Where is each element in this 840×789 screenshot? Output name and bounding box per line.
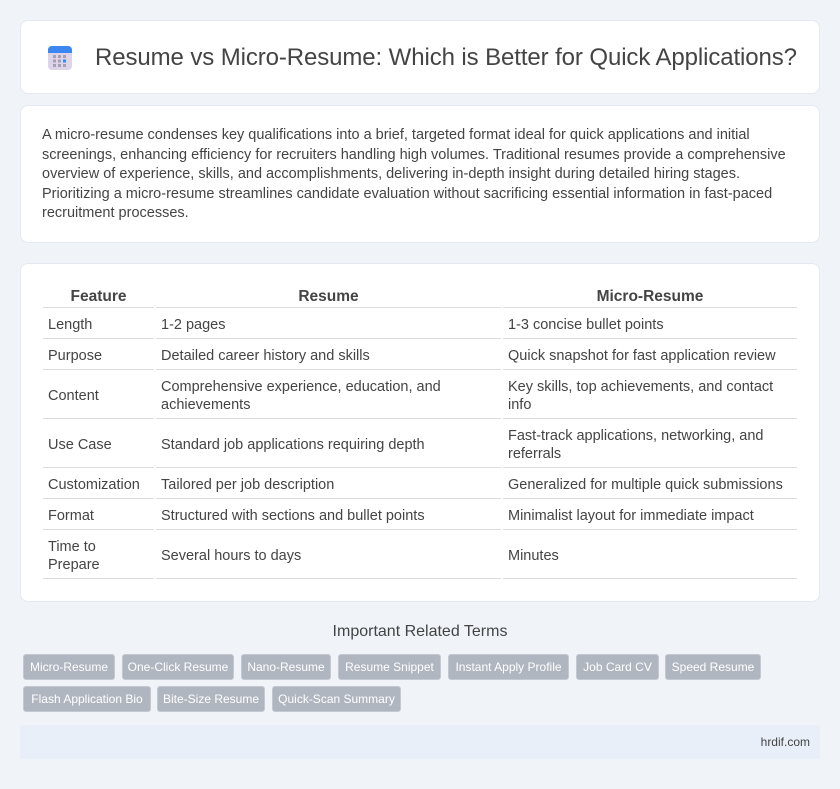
related terms heading: Important Related Terms [333, 623, 507, 640]
row: length: Length [48, 317, 92, 333]
column heading: resume: Resume [298, 288, 359, 305]
comparison table: 1-3 concise bullet points [508, 317, 664, 333]
comparison table: Structured with sections and bullet points [161, 508, 425, 524]
comparison table: Quick snapshot for fast application review [508, 348, 776, 364]
intro panel [20, 105, 820, 243]
row: time to prepare [48, 539, 100, 573]
tag: One-Click Resume [128, 660, 228, 674]
tag: Instant Apply Profile [455, 660, 562, 674]
row: customization: Customization [48, 477, 140, 493]
tag: Job Card CV [583, 660, 652, 674]
column heading: feature: Feature [70, 288, 126, 305]
comparison table: Generalized for multiple quick submissions [508, 477, 783, 493]
tag: Resume Snippet [345, 660, 434, 674]
comparison table: Fast-track applications, networking, and [508, 428, 764, 444]
tag [272, 686, 401, 712]
comparison table: Detailed career history and skills [161, 348, 370, 364]
intro text: overview of experience, skills, and accomplishments, delivering in-depth insight during detailed hiring stages. [42, 166, 740, 182]
tag [157, 686, 265, 712]
comparison table: achievements [161, 397, 250, 413]
row: purpose: Purpose [48, 348, 102, 364]
header panel [20, 20, 820, 94]
tag [241, 654, 331, 680]
tag [122, 654, 234, 680]
tag [23, 654, 115, 680]
related terms tags [23, 654, 761, 712]
intro text [42, 127, 786, 221]
tag [665, 654, 761, 680]
tag: Bite-Size Resume [163, 692, 259, 706]
tag [448, 654, 569, 680]
comparison table: Several hours to days [161, 548, 301, 564]
row: content: Content [48, 388, 99, 404]
tag [576, 654, 659, 680]
comparison table [43, 288, 797, 579]
row: format: Format [48, 508, 94, 524]
tag: Flash Application Bio [31, 692, 143, 706]
comparison table: Tailored per job description [161, 477, 334, 493]
comparison table: Key skills, top achievements, and contact [508, 379, 773, 395]
comparison table: Minutes [508, 548, 559, 564]
comparison table: referrals [508, 446, 561, 462]
intro text: screenings, enhancing efficiency for recruiters handling high volumes. Traditional resumes provide a comprehensive [42, 146, 786, 162]
tag [338, 654, 441, 680]
tag: Nano-Resume [247, 660, 325, 674]
title: Resume vs Micro-Resume: Which is Better for Quick Applications? [95, 44, 797, 71]
tag: Quick-Scan Summary [278, 692, 395, 706]
tag [23, 686, 151, 712]
comparison table: Standard job applications requiring depth [161, 437, 425, 453]
row: use case: Use Case [48, 437, 112, 453]
tag: Speed Resume [672, 660, 754, 674]
intro text: Prioritizing a micro-resume streamlines candidate evaluation without sacrificing essential information in fast-paced [42, 186, 772, 202]
comparison table: Minimalist layout for immediate impact [508, 508, 754, 524]
footer bar [20, 725, 820, 759]
icon: calendar [48, 46, 72, 70]
row: time to prepare: Time to [48, 539, 96, 555]
row: time to prepare: Prepare [48, 557, 100, 573]
comparison table: 1-2 pages [161, 317, 226, 333]
footer source: hrdif.com [761, 735, 810, 749]
intro text: A micro-resume condenses key qualifications into a brief, targeted format ideal for quick applications and initial [42, 127, 750, 143]
intro text: recruitment processes. [42, 205, 189, 221]
comparison table panel [20, 263, 820, 602]
column heading: micro-resume: Micro-Resume [597, 288, 703, 305]
comparison table: info [508, 397, 531, 413]
tag: Micro-Resume [30, 660, 108, 674]
comparison table: Comprehensive experience, education, and [161, 379, 441, 395]
